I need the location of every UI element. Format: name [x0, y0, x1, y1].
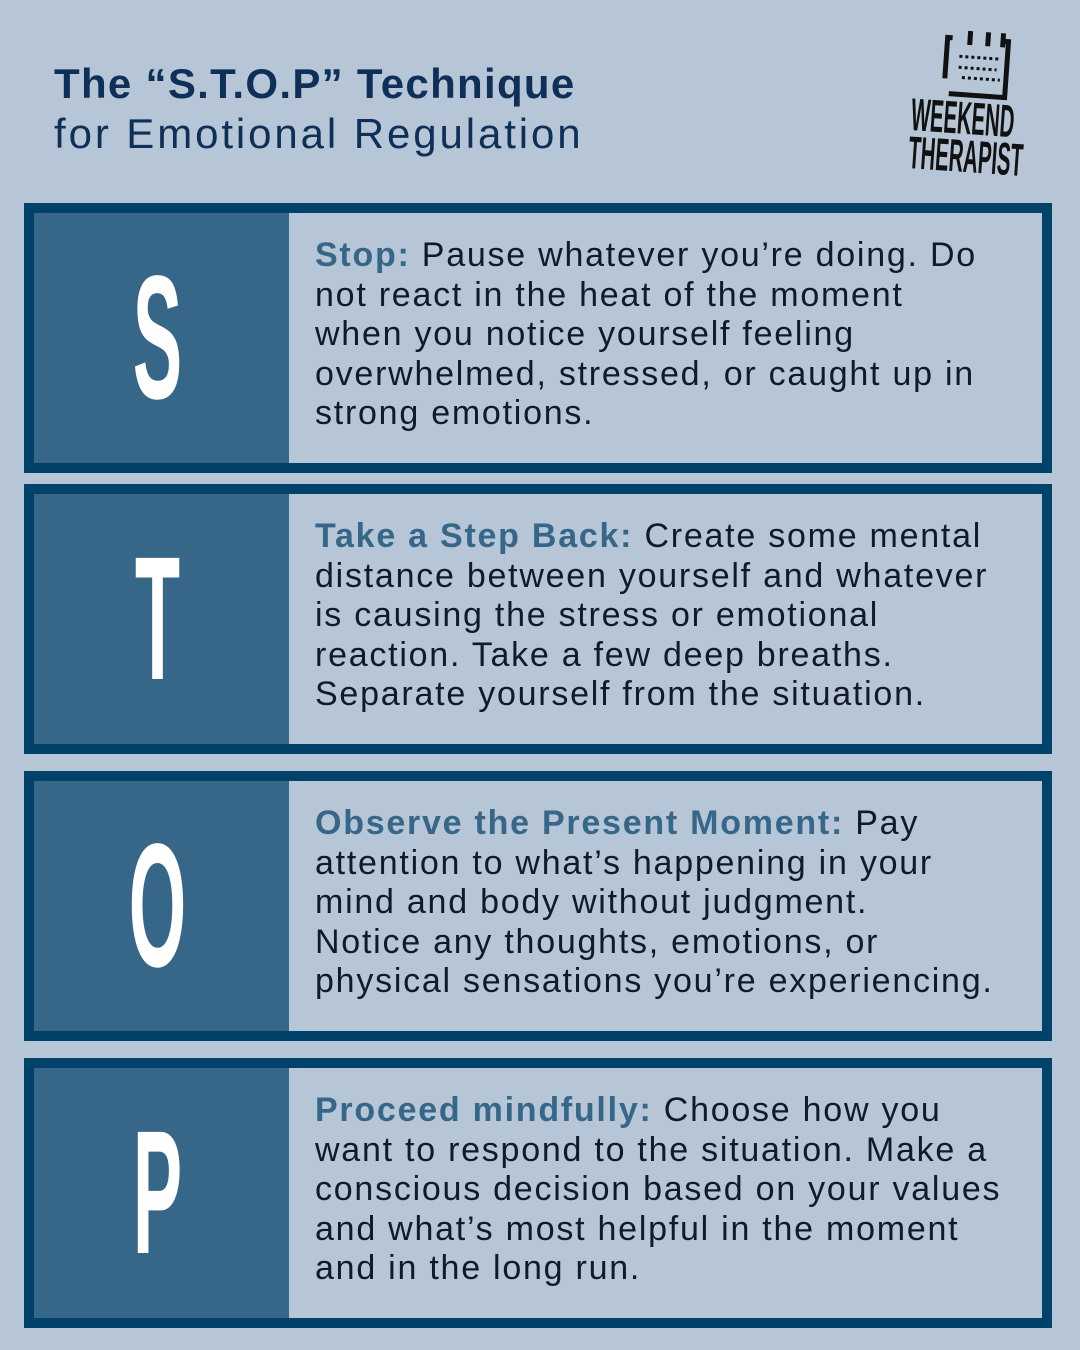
logo text: THERAPIST [907, 126, 1025, 186]
text: Observe [315, 804, 994, 1000]
text: Stop [315, 236, 977, 432]
text: Proceed mindfully: want to respond to the situation. Make a [315, 1130, 988, 1168]
text: Stop: Stop: Pause whatever you’re doing. Do [315, 236, 977, 274]
text: Take a Step Back: distance between yourself and whatever [315, 556, 988, 594]
text: Proceed mindfully: Proceed mindfully: Choose how you [315, 1091, 942, 1129]
panel: S [24, 203, 1052, 473]
text: Take a Step Back: Take a Step Back: Create some mental [315, 517, 982, 555]
letter T: T [135, 521, 180, 717]
text: Observe: Notice any thoughts, emotions, or [315, 922, 879, 960]
text: Observe: attention to what’s happening in your [315, 844, 933, 882]
subtitle: for Emotional Regulation [54, 110, 584, 157]
letter O: O [129, 808, 186, 1004]
panel: O [24, 771, 1052, 1041]
text: Proceed mindfully: conscious decision based on your values [315, 1170, 1001, 1208]
text: Stop: strong emotions. [315, 394, 594, 432]
text: Proceed mindfully [315, 1091, 1001, 1287]
letter S: S [133, 240, 182, 436]
logo text [907, 88, 1025, 186]
text: Observe: mind and body without judgment. [315, 883, 868, 921]
panel: P [24, 1058, 1052, 1328]
text: Take a Step Back: reaction. Take a few deep breaths. [315, 636, 894, 674]
icon: calendar [942, 30, 1012, 100]
letter P: P [133, 1095, 182, 1291]
text: Stop: when you notice yourself feeling [315, 315, 855, 353]
text: Take a Step Back: is causing the stress or emotional [315, 596, 879, 634]
text: Proceed mindfully: and in the long run. [315, 1249, 641, 1287]
text: Stop: not react in the heat of the moment [315, 276, 904, 314]
panel: T [24, 484, 1052, 754]
text: Proceed mindfully: and what’s most helpful in the moment [315, 1210, 959, 1248]
logo text: WEEKEND [909, 88, 1016, 147]
title: The “S.T.O.P” Technique [54, 60, 576, 107]
text: Take a Step Back [315, 517, 988, 713]
text: Observe: Observe the Present Moment: Pay [315, 804, 919, 842]
text: Stop: overwhelmed, stressed, or caught up in [315, 354, 975, 392]
logo: The Weekend Therapist [907, 30, 1025, 186]
text: Take a Step Back: Separate yourself from the situation. [315, 675, 926, 713]
text: Observe: physical sensations you’re experiencing. [315, 962, 994, 1000]
